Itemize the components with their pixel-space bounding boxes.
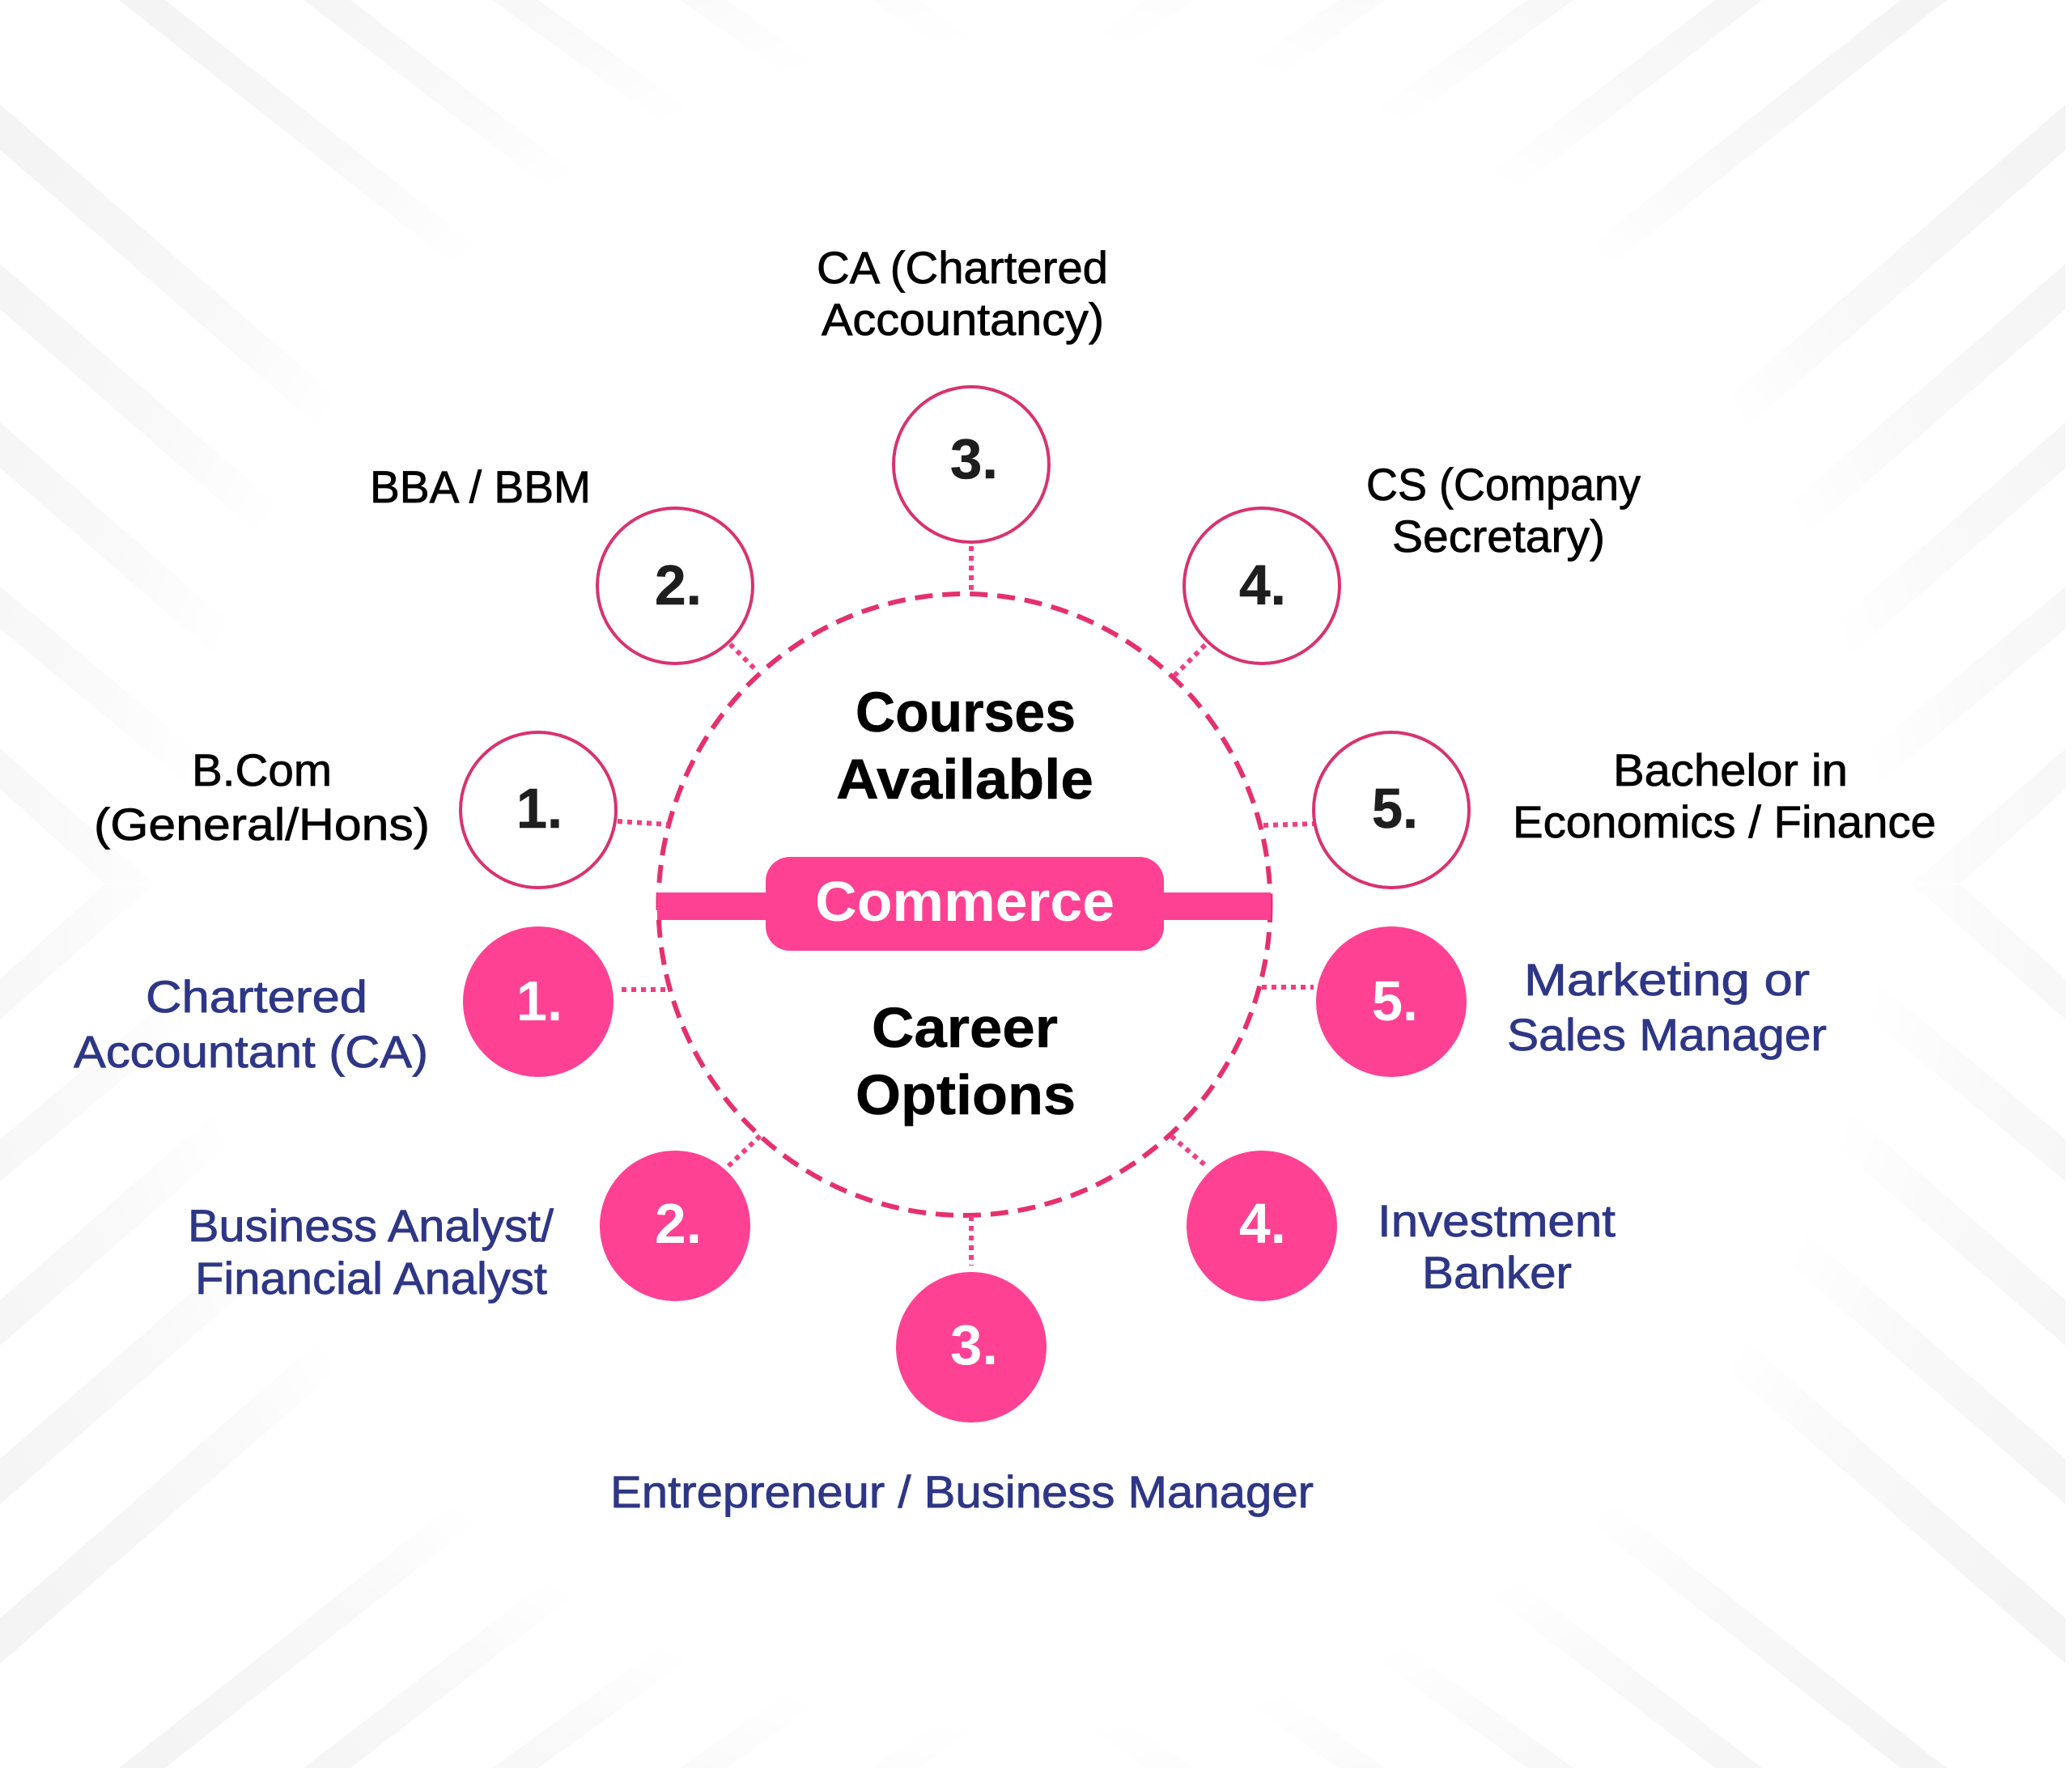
heading: Career Options: Career bbox=[872, 996, 1058, 1059]
heading: Career Options: Options bbox=[856, 1063, 1076, 1126]
course 2 circle: 2. bbox=[655, 553, 702, 617]
career label: Chartered Accountant: Chartered bbox=[146, 971, 367, 1022]
central dashed ring bbox=[659, 594, 1271, 1215]
career 3 circle: 3. bbox=[950, 1313, 998, 1376]
course label: CA: CA (Chartered bbox=[817, 242, 1108, 293]
career label: Entrepreneur / Business Manager: Entrepreneur / Business Manager bbox=[610, 1466, 1314, 1517]
course label: BBA / BBM: BBA / BBM bbox=[370, 461, 591, 512]
course label: CS: CS (Company bbox=[1366, 459, 1641, 510]
career label: Marketing or Sales Manager: Marketing or bbox=[1524, 954, 1810, 1005]
career label: Investment Banker: Investment bbox=[1378, 1195, 1616, 1246]
heading: Career Options bbox=[856, 996, 1076, 1126]
career label: Business / Financial Analyst: Business Analyst/ bbox=[188, 1200, 554, 1251]
career 1 circle bbox=[463, 926, 614, 1077]
course 5 circle: 5. bbox=[1372, 777, 1418, 840]
course label: Bachelor in Economics / Finance bbox=[1513, 744, 1936, 847]
heading: Courses Available: Available bbox=[836, 748, 1093, 811]
course label: Bachelor in Economics / Finance: Bachelor in bbox=[1613, 744, 1848, 795]
career 2 circle bbox=[600, 1151, 750, 1301]
course label: CA: Accountancy) bbox=[822, 294, 1104, 345]
career 3 circle bbox=[896, 1272, 1047, 1422]
course 4 circle bbox=[1184, 508, 1340, 664]
course label: CS bbox=[1366, 459, 1641, 562]
career label: Investment Banker bbox=[1378, 1195, 1616, 1298]
connectors between ring and circles bbox=[618, 546, 1314, 1266]
career label: Chartered Accountant bbox=[74, 971, 428, 1077]
course 3 circle: 3. bbox=[950, 427, 998, 490]
career label: Business / Financial Analyst: Financial Analyst bbox=[195, 1253, 547, 1304]
course 5 circle bbox=[1314, 732, 1469, 888]
course label: B.Com: B.Com bbox=[192, 744, 332, 795]
career 5 circle: 5. bbox=[1372, 969, 1418, 1032]
course 4 circle: 4. bbox=[1239, 553, 1286, 617]
career label: Chartered Accountant: Accountant (CA) bbox=[74, 1026, 428, 1077]
career 4 circle: 4. bbox=[1239, 1192, 1286, 1255]
course 2 circle bbox=[597, 508, 753, 664]
course 1 circle bbox=[461, 732, 616, 888]
career 2 circle: 2. bbox=[655, 1192, 702, 1255]
career 5 circle bbox=[1316, 926, 1467, 1077]
career label: Marketing or Sales Manager: Sales Manager bbox=[1507, 1009, 1827, 1060]
course 1 circle: 1. bbox=[516, 777, 563, 840]
heading: Courses Available bbox=[836, 680, 1093, 811]
career label: Marketing or Sales Manager bbox=[1507, 954, 1827, 1060]
center banner: Commerce bbox=[657, 857, 1271, 951]
course label: CA bbox=[817, 242, 1108, 345]
heading: Courses Available: Courses bbox=[856, 680, 1076, 744]
course label: Bachelor in Economics / Finance: Economics / Finance bbox=[1513, 796, 1936, 847]
course 3 circle bbox=[894, 387, 1049, 542]
career 1 circle: 1. bbox=[516, 969, 563, 1032]
course label: CS: Secretary) bbox=[1392, 511, 1605, 562]
center banner: Commerce: Commerce bbox=[815, 870, 1115, 933]
career 4 circle bbox=[1187, 1151, 1337, 1301]
career label: Business / Financial Analyst bbox=[188, 1200, 554, 1304]
career label: Investment Banker: Banker bbox=[1422, 1247, 1572, 1298]
course label: B.Com bbox=[94, 744, 430, 850]
course label: B.Com: (General/Hons) bbox=[94, 799, 430, 850]
